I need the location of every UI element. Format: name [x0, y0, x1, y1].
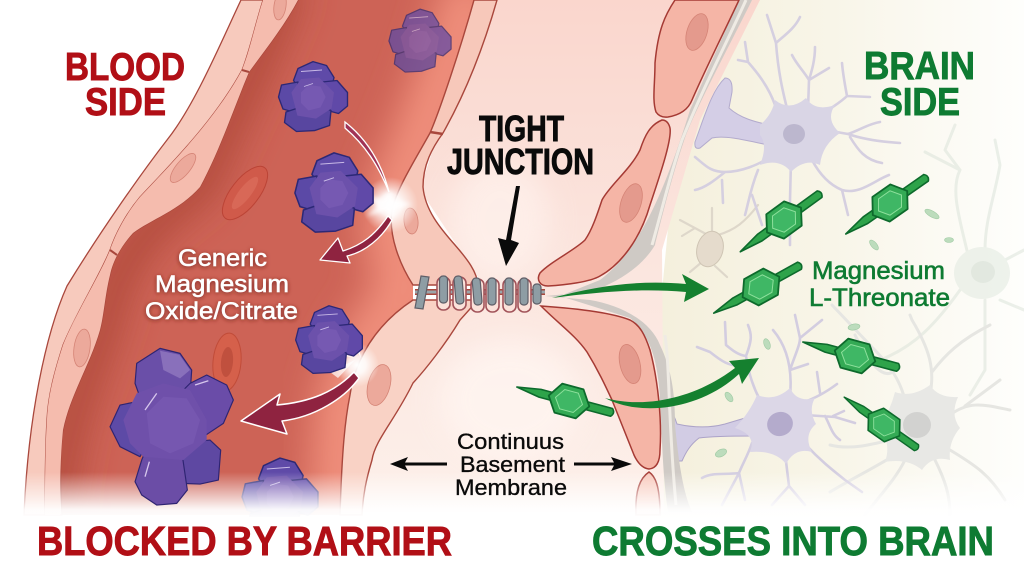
arrow: red lower deflection: [241, 372, 359, 434]
icon: small green particles: [714, 207, 954, 459]
label: tight junction: [447, 108, 594, 182]
vessel wall: right endothelial cells: [340, 0, 497, 515]
label: continuous basement membrane: [455, 429, 567, 500]
icon: right endothelial cells: [538, 0, 739, 515]
neuron: small tan cell: [680, 205, 758, 277]
heading: blood side: [65, 46, 185, 124]
label: continuous basement membrane: Basement: [460, 452, 565, 477]
label: continuous basement membrane: Continuus: [457, 429, 564, 454]
neuron: upper astrocyte: [695, 15, 900, 245]
icon: red blood cells: [211, 159, 276, 392]
impact: lower burst and streaks: [322, 316, 379, 387]
neuron: faint upper right: [885, 125, 1024, 395]
magnesium cluster: faded top: [389, 9, 451, 72]
impact: upper burst and streaks: [345, 122, 418, 233]
magnesium cluster: faded bottom: [241, 457, 319, 510]
vessel wall: left outer layer: [24, 0, 298, 515]
arrow: membrane right pointer: [574, 457, 632, 471]
label: magnesium L-threonate: L-Threonate: [809, 284, 950, 312]
label: generic magnesium: Oxide/Citrate: [145, 298, 298, 325]
caption: blocked by barrier: BLOCKED BY BARRIER: [37, 518, 452, 564]
arrow: green lower crossing: [605, 358, 759, 408]
label: generic magnesium: [145, 245, 298, 325]
magnesium cluster: middle: [295, 153, 373, 232]
heading: blood side: SIDE: [85, 81, 166, 124]
arrow: membrane left pointer: [390, 457, 447, 471]
panel: blood vessel lumen: [61, 0, 474, 510]
heading: blood side: BLOOD: [65, 46, 185, 89]
label: generic magnesium: Generic: [178, 245, 267, 272]
label: magnesium L-threonate: [809, 257, 950, 312]
arrow: red upper deflection: [320, 216, 392, 263]
neuron: grey right: [830, 305, 1010, 515]
panel: central endothelial space: [350, 0, 760, 512]
basement membrane: grey layer: [545, 0, 752, 512]
molecules: magnesium L-threonate: [513, 164, 936, 460]
label: tight junction: JUNCTION: [447, 141, 594, 182]
label: magnesium L-threonate: Magnesium: [812, 257, 945, 285]
neuron: lower astrocyte: [665, 315, 862, 505]
heading: brain side: [864, 45, 975, 124]
heading: brain side: SIDE: [880, 81, 960, 124]
magnesium cluster: large: [110, 348, 233, 505]
label: tight junction: TIGHT: [479, 108, 564, 149]
arrow: green upper crossing: [552, 274, 709, 302]
label: generic magnesium: Magnesium: [155, 271, 289, 298]
heading: brain side: BRAIN: [864, 45, 975, 88]
arrow: tight junction pointer: [498, 186, 520, 266]
magnesium cluster: upper: [278, 62, 348, 132]
tight junction: [415, 276, 545, 312]
label: continuous basement membrane: Membrane: [455, 475, 567, 500]
magnesium cluster: lower: [296, 306, 362, 373]
bottom fade: [0, 472, 1024, 520]
icon: cell nuclei: [71, 0, 712, 408]
panel: brain tissue background: [640, 0, 1024, 520]
